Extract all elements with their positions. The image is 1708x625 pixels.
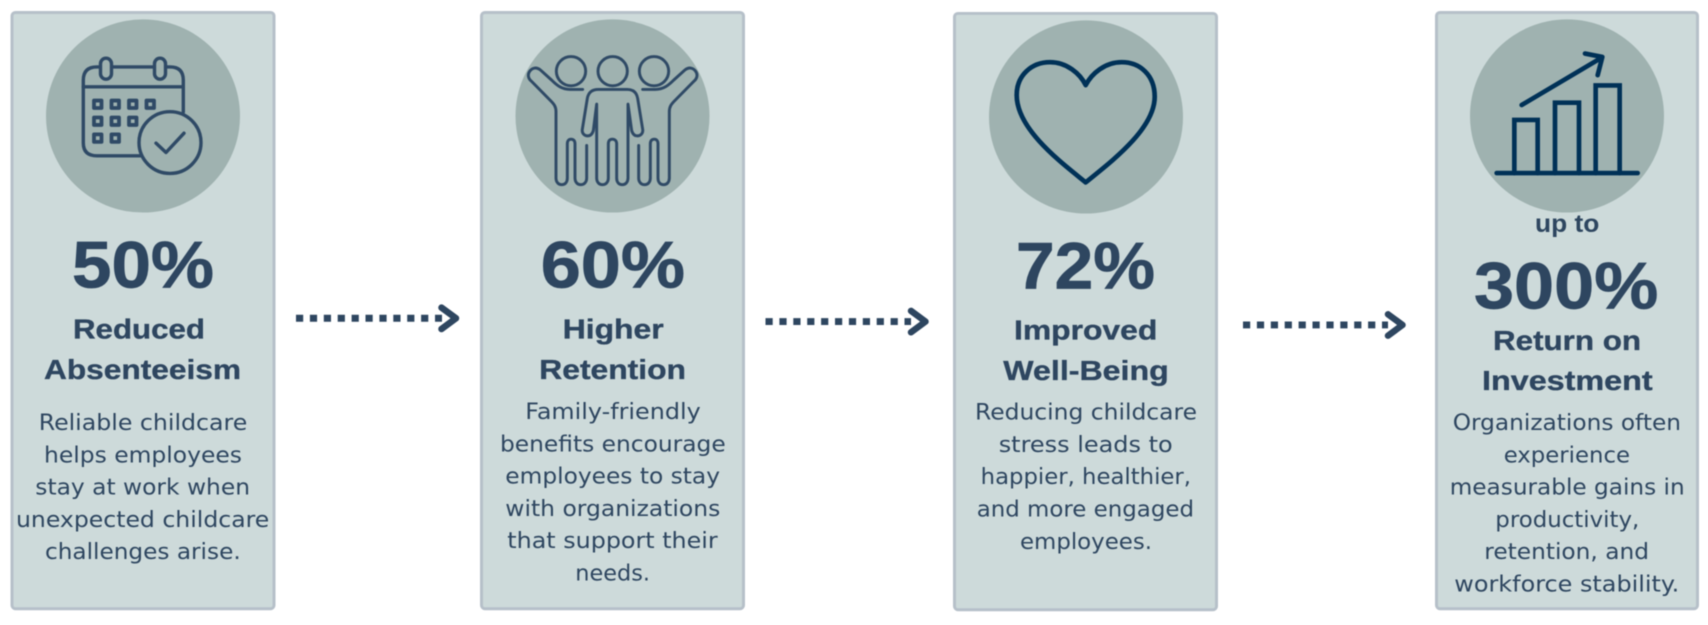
description: challenges arise. [45, 540, 241, 565]
arrow: step 3 to 4 [1243, 314, 1402, 336]
heading: Well-Being [1003, 355, 1169, 386]
description: helps employees [44, 443, 242, 468]
description: Reducing childcare [975, 401, 1197, 426]
icon: three people [528, 57, 697, 185]
icon: rising bar chart [1497, 54, 1638, 173]
description: unexpected childcare [16, 508, 269, 533]
heading: Improved [1014, 315, 1157, 345]
panel background [12, 12, 274, 609]
description [975, 401, 1197, 555]
heading: Retention [539, 354, 686, 385]
description: employees. [1020, 530, 1152, 555]
panel: reduced absenteeism [12, 12, 274, 609]
panel background [954, 13, 1216, 610]
description: Reliable childcare [39, 411, 247, 436]
icon: heart [1017, 62, 1155, 182]
description: workforce stability. [1454, 572, 1679, 597]
description: experience [1504, 443, 1630, 468]
description: stay at work when [35, 476, 250, 501]
panel background [1436, 12, 1698, 609]
heading [1003, 315, 1169, 386]
icon disc [989, 20, 1183, 214]
description [1450, 411, 1685, 597]
description: needs. [575, 561, 650, 586]
description: employees to stay [505, 465, 720, 490]
description [16, 411, 269, 565]
description: productivity, [1495, 508, 1639, 533]
description: happier, healthier, [981, 465, 1191, 490]
description: stress leads to [999, 433, 1173, 458]
description: Organizations often [1453, 411, 1681, 436]
stat: 60%: 60% [541, 228, 685, 302]
description: benefits encourage [500, 432, 726, 457]
panel: improved well-being [954, 13, 1216, 610]
panel background [482, 12, 744, 609]
heading: Higher [563, 314, 664, 344]
heading: Investment [1482, 365, 1653, 396]
stat: 50%: 50% [72, 228, 214, 302]
heading [1482, 325, 1653, 396]
icon disc [1470, 19, 1664, 213]
arrow: step 1 to 2 [296, 308, 456, 329]
icon disc [46, 19, 240, 213]
description: with organizations [505, 497, 720, 522]
heading [539, 314, 686, 385]
panel: higher retention [482, 12, 744, 609]
description [500, 400, 726, 586]
heading: Reduced [73, 314, 205, 344]
stat: 72%: 72% [1016, 229, 1155, 303]
heading [44, 314, 241, 385]
panel: return on investment [1436, 12, 1698, 609]
description: measurable gains in [1450, 476, 1685, 501]
arrow: step 2 to 3 [766, 311, 926, 332]
description: that support their [507, 529, 719, 554]
heading: Absenteeism [44, 354, 241, 385]
description: retention, and [1484, 540, 1649, 565]
icon: calendar with check [83, 58, 201, 173]
description: and more engaged [977, 498, 1194, 522]
description: Family-friendly [525, 400, 701, 425]
icon disc [516, 19, 710, 213]
heading: Return on [1493, 325, 1641, 356]
label: up to: up to [1535, 210, 1599, 238]
stat: 300%: 300% [1474, 249, 1658, 323]
